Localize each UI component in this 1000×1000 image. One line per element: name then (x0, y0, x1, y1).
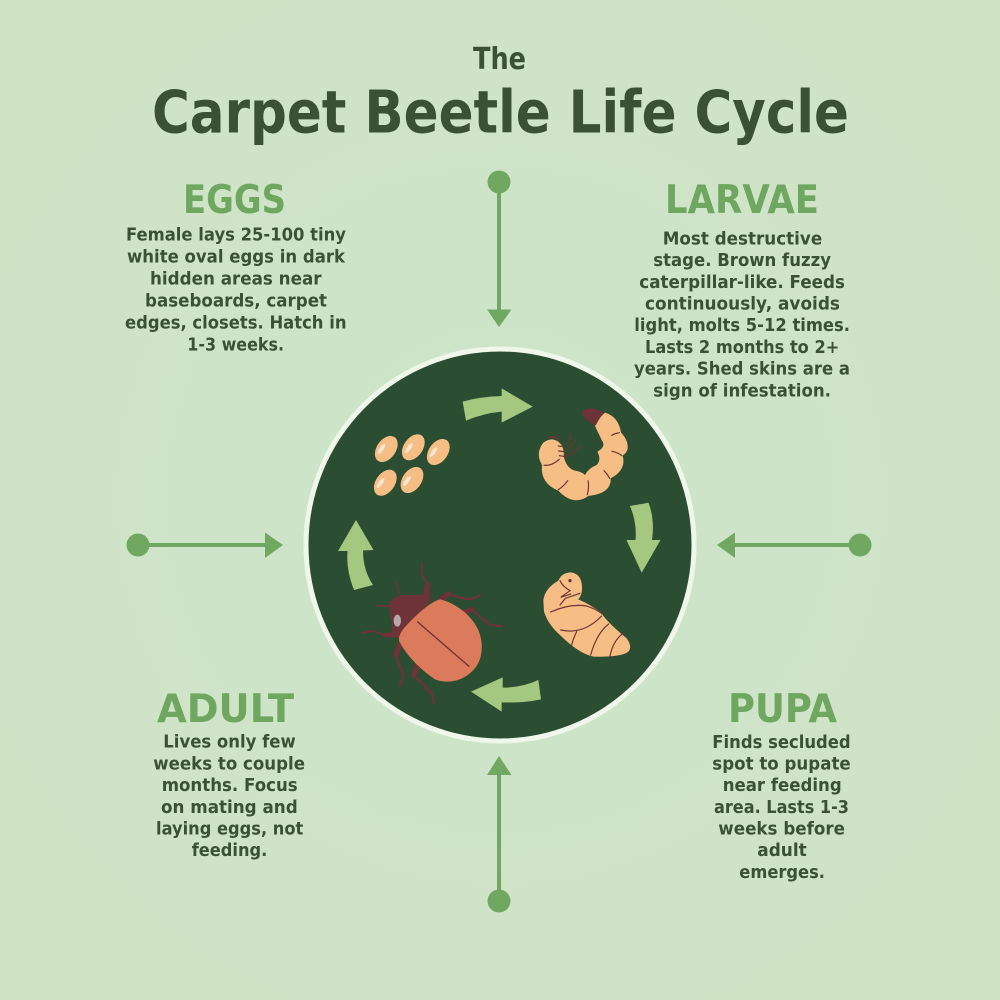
text block: adult description: laying eggs, not (156, 820, 303, 840)
main title: Carpet Beetle Life Cycle (152, 78, 849, 146)
title (152, 42, 849, 146)
panel: central life cycle circle (306, 349, 694, 741)
text block: eggs description: 1-3 weeks. (187, 336, 284, 356)
arrow: eggs to larvae (463, 388, 533, 423)
beetle legs (362, 563, 502, 703)
text block: pupa description (712, 733, 851, 883)
text block: larvae description: stage. Brown fuzzy (653, 251, 832, 271)
text block: eggs description (125, 226, 347, 356)
heading: eggs: EGGS (183, 178, 286, 223)
text block: larvae description (634, 230, 850, 401)
text block: larvae description: sign of infestation. (653, 381, 831, 401)
icon: pupa (543, 572, 630, 657)
arrow: adult to eggs (338, 520, 374, 590)
text block: pupa description: weeks before (718, 820, 845, 840)
text block: pupa description: near feeding (723, 776, 842, 796)
arrow: left pointer (126, 532, 283, 558)
panel: larvae text (634, 178, 850, 401)
arrow: right pointer (717, 532, 872, 558)
icon: adult beetle (362, 563, 502, 703)
text block: eggs description: hidden areas near (150, 270, 322, 290)
icon: larva (539, 408, 628, 500)
text block: larvae description: caterpillar-like. Feeds (639, 273, 845, 293)
text block: adult description: months. Focus (162, 776, 298, 796)
panel: adult text (153, 687, 305, 861)
arrow: larvae to pupa (626, 503, 660, 573)
text block: pupa description: emerges. (739, 863, 825, 883)
text block: adult description: weeks to couple (153, 754, 305, 774)
text block: pupa description: area. Lasts 1-3 (714, 798, 849, 818)
text block: larvae description: Lasts 2 months to 2+ (645, 338, 839, 358)
arrow: pupa to adult (471, 677, 541, 712)
icon: eggs (369, 430, 454, 500)
text block: adult description: Lives only few (163, 732, 296, 752)
text block: adult description (153, 732, 305, 861)
panel: pupa text (712, 687, 851, 883)
text block: eggs description: Female lays 25-100 tiny (126, 226, 347, 246)
arrow: bottom pointer (487, 756, 512, 912)
beetle body (388, 587, 431, 637)
heading: larvae: LARVAE (665, 178, 819, 223)
heading: pupa: PUPA (728, 687, 837, 732)
text block: eggs description: edges, closets. Hatch in (125, 314, 346, 334)
text block: larvae description: Most destructive (663, 230, 822, 250)
text block: larvae description: years. Shed skins are a (634, 360, 850, 380)
text block: eggs description: white oval eggs in dark (127, 248, 345, 268)
heading: adult: ADULT (157, 687, 294, 732)
text block: adult description: on mating and (161, 798, 298, 818)
arrow: top pointer (487, 170, 512, 327)
panel: eggs text (125, 178, 347, 356)
text block: pupa description: spot to pupate (712, 754, 851, 774)
text block: adult description: feeding. (192, 841, 267, 861)
title kicker: The (473, 42, 526, 77)
text block: pupa description: Finds secluded (712, 733, 851, 753)
text block: larvae description: continuously, avoids (645, 294, 840, 314)
text block: larvae description: light, molts 5-12 times. (634, 316, 850, 336)
text block: eggs description: baseboards, carpet (145, 292, 327, 312)
text block: pupa description: adult (757, 841, 807, 861)
